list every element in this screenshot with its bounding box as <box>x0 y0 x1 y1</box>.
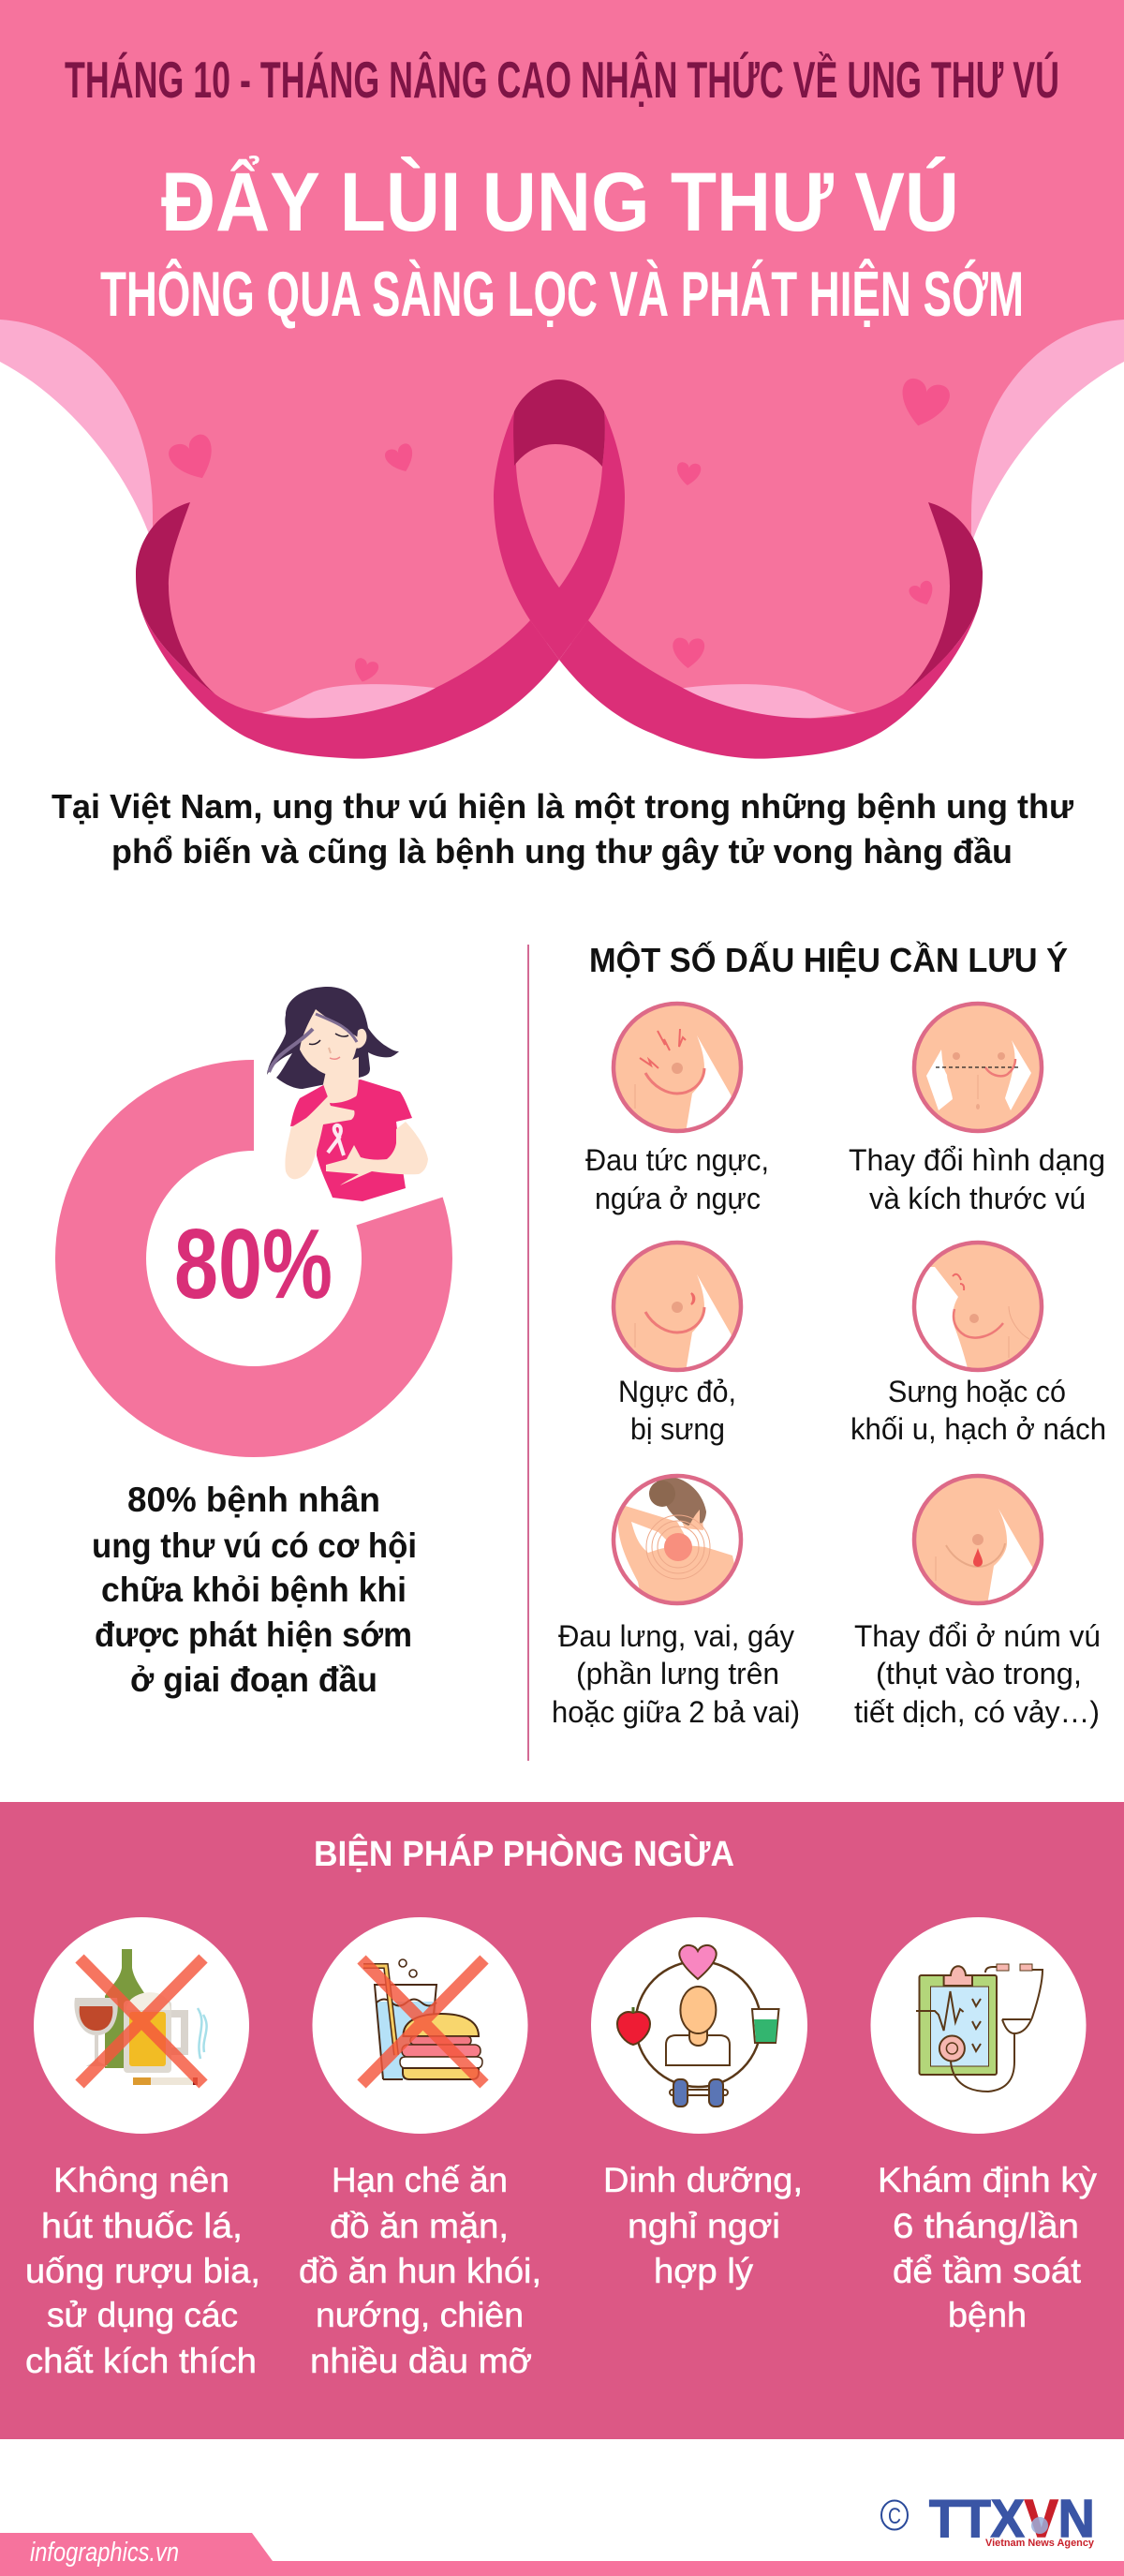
icon: healthy lifestyle <box>591 1917 807 2134</box>
text block: intro <box>52 787 1074 871</box>
sign: nipple change <box>854 1474 1101 1729</box>
logo: TTXVN: TTXVN <box>929 2489 1095 2549</box>
logo: copyright <box>881 2500 908 2530</box>
text block: no alcohol or tobacco: hút thuốc lá, <box>41 2207 243 2245</box>
logo: TTXVN: Vietnam News Agency <box>985 2538 1095 2549</box>
text block: 80 percent caption: 80% bệnh nhân <box>127 1481 380 1519</box>
icons: hearts <box>166 377 952 685</box>
text block: healthy lifestyle: Dinh dưỡng, <box>603 2161 803 2199</box>
text block: no alcohol or tobacco: Không nên <box>53 2161 229 2199</box>
sign: shape change <box>849 1002 1105 1215</box>
text block: intro: phổ biến và cũng là bệnh ung thư gây tử vong hàng đầu <box>111 832 1013 871</box>
text block: no junk food: nhiều dầu mỡ <box>310 2342 532 2380</box>
sign: shape change: Thay đổi hình dạng <box>849 1143 1105 1177</box>
number: 80%: 80% <box>174 1209 333 1319</box>
text block: 80 percent caption <box>92 1481 417 1699</box>
sign: lump in armpit: Sưng hoặc có <box>888 1375 1066 1408</box>
text block: medical checkup: 6 tháng/lần <box>893 2207 1079 2245</box>
sign: shape change: và kích thước vú <box>869 1182 1086 1215</box>
sign: back pain: Đau lưng, vai, gáy <box>558 1619 794 1653</box>
panel: prevention <box>0 1802 1124 2439</box>
source: infographics.vn: infographics.vn <box>30 2538 179 2568</box>
text block: no junk food: đồ ăn hun khói, <box>299 2252 541 2290</box>
text block: medical checkup: bệnh <box>948 2296 1027 2334</box>
heading: prevention: BIỆN PHÁP PHÒNG NGỪA <box>314 1833 734 1874</box>
icon: no alcohol or tobacco <box>34 1917 249 2134</box>
heading: warning signs: MỘT SỐ DẤU HIỆU CẦN LƯU Ý <box>589 940 1068 979</box>
text block: medical checkup: để tầm soát <box>893 2252 1082 2290</box>
text block: healthy lifestyle <box>603 2161 803 2290</box>
sign: nipple change: tiết dịch, có vảy…) <box>854 1695 1100 1729</box>
sign: chest pain: ngứa ở ngực <box>595 1182 761 1215</box>
text block: no junk food: nướng, chiên <box>316 2296 524 2334</box>
text block: no junk food <box>299 2161 541 2380</box>
text block: no alcohol or tobacco: chất kích thích <box>25 2342 257 2380</box>
text block: 80 percent caption: ở giai đoạn đầu <box>130 1660 377 1699</box>
icon: pink ribbon <box>136 380 983 759</box>
text block: 80 percent caption: được phát hiện sớm <box>95 1616 412 1654</box>
icon: red cross <box>80 1958 203 2084</box>
text block: 80 percent caption: ung thư vú có cơ hội <box>92 1526 417 1565</box>
icon: medical checkup <box>871 1917 1087 2134</box>
panel: header <box>0 0 1124 759</box>
sign: redness: Ngực đỏ, <box>618 1375 736 1408</box>
panel: footer <box>0 2489 1124 2576</box>
text block: no junk food: Hạn chế ăn <box>332 2161 508 2199</box>
title: ĐẨY LÙI UNG THƯ VÚ <box>161 155 959 248</box>
sign: nipple change: Thay đổi ở núm vú <box>854 1619 1101 1653</box>
text block: no alcohol or tobacco: sử dụng các <box>47 2296 238 2334</box>
sign: chest pain: Đau tức ngực, <box>585 1143 769 1177</box>
sign: redness: bị sưng <box>630 1412 725 1446</box>
panel: 80 percent <box>55 987 452 1699</box>
text block: no alcohol or tobacco <box>25 2161 260 2380</box>
sign: lump in armpit <box>850 1241 1106 1446</box>
text block: healthy lifestyle: nghỉ ngơi <box>628 2207 780 2245</box>
text block: no alcohol or tobacco: uống rượu bia, <box>25 2252 260 2290</box>
sign: lump in armpit: khối u, hạch ở nách <box>850 1412 1106 1446</box>
sign: redness <box>612 1241 743 1446</box>
sign: nipple change: (thụt vào trong, <box>876 1657 1082 1690</box>
sign: back pain: hoặc giữa 2 bả vai) <box>552 1695 800 1729</box>
icon: no junk food <box>313 1917 528 2134</box>
text block: medical checkup: Khám định kỳ <box>878 2161 1098 2199</box>
sign: chest pain <box>585 1002 769 1215</box>
text block: intro: Tại Việt Nam, ung thư vú hiện là một trong những bệnh ung thư <box>52 787 1074 826</box>
text block: medical checkup <box>878 2161 1098 2334</box>
sign: back pain <box>552 1476 800 1729</box>
logo: copyright: C <box>888 2504 901 2529</box>
text block: 80 percent caption: chữa khỏi bệnh khi <box>101 1571 407 1609</box>
illustration: woman <box>267 987 428 1201</box>
text block: no junk food: đồ ăn mặn, <box>330 2207 509 2245</box>
panel: warning signs <box>552 940 1106 1729</box>
text block: healthy lifestyle: hợp lý <box>654 2252 754 2290</box>
chart: donut 80% <box>55 1060 452 1457</box>
icon: red cross <box>362 1959 484 2084</box>
sign: back pain: (phần lưng trên <box>576 1657 779 1690</box>
